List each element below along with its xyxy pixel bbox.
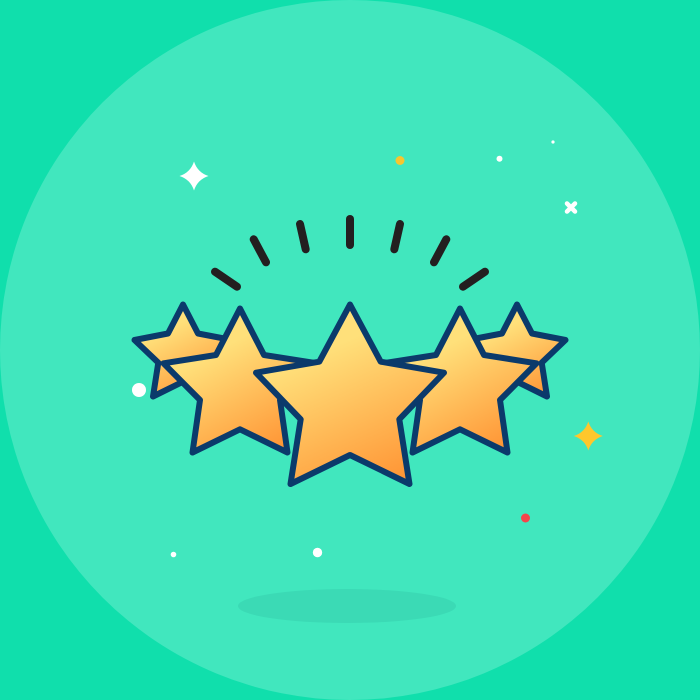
dot: red <box>521 514 530 522</box>
star: far left small <box>134 304 232 396</box>
star: center large <box>256 304 444 484</box>
star: far right small <box>468 304 566 396</box>
dot: white tiny <box>551 140 555 144</box>
dot: yellow <box>396 156 404 165</box>
ground shadow <box>238 589 456 623</box>
sparkle: yellow <box>574 422 603 450</box>
dot: white top <box>496 156 502 162</box>
dot: white lower center <box>313 548 322 557</box>
burst rays above stars <box>215 219 485 287</box>
star: left medium <box>164 308 317 452</box>
dot: white left <box>132 383 146 397</box>
icon: white cross <box>567 204 575 212</box>
star: right medium <box>383 308 536 452</box>
stars group <box>134 304 566 484</box>
sparkle: white <box>180 162 208 190</box>
dot: white lower left <box>171 552 176 557</box>
